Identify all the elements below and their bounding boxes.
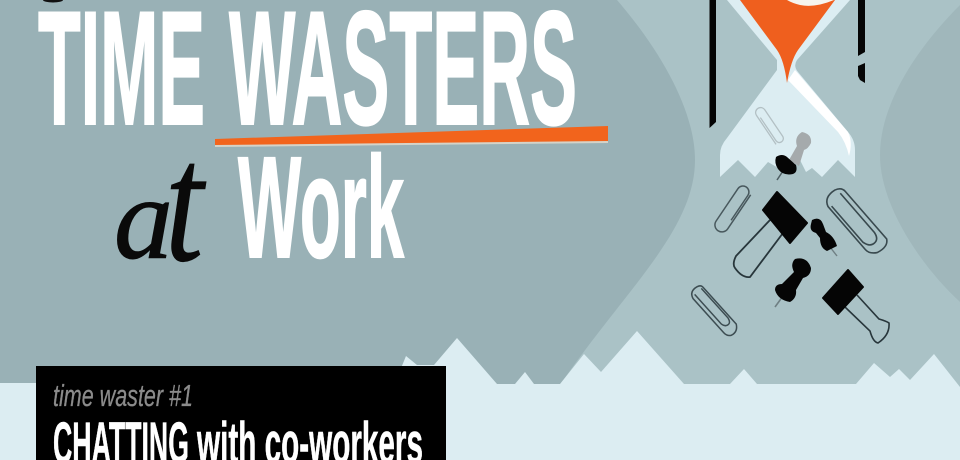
paper clip large [823, 185, 890, 258]
infographic canvas: Work [238, 127, 404, 288]
paper clip in glass [754, 106, 785, 145]
sand highlight [787, 0, 834, 6]
paper clip left [712, 184, 753, 235]
binder clip upper [734, 192, 807, 277]
title: at: a [114, 153, 173, 284]
hourglass left bar [710, 0, 716, 128]
orange underline [215, 126, 608, 147]
panel: time waster heading [36, 366, 446, 460]
glass highlight [788, 70, 851, 156]
push pin centre right [811, 219, 837, 256]
hourglass right bar [858, 0, 865, 83]
panel background [36, 366, 446, 460]
paper clip lower left [689, 284, 740, 338]
orange sand [740, 0, 835, 83]
time waster label: time waster #1 [53, 378, 193, 413]
decorative dot above title [43, 0, 63, 2]
background shape: right dark blob [880, 5, 960, 302]
push pin in glass [775, 132, 811, 180]
background shape: left dark blob [0, 0, 695, 385]
snowy mountain ground [0, 331, 960, 460]
title: at [114, 108, 207, 297]
hourglass [710, 0, 865, 180]
glass body [720, 0, 855, 177]
push pin centre lower [775, 258, 811, 307]
title: at: t [165, 108, 207, 297]
binder clip lower [823, 270, 889, 343]
